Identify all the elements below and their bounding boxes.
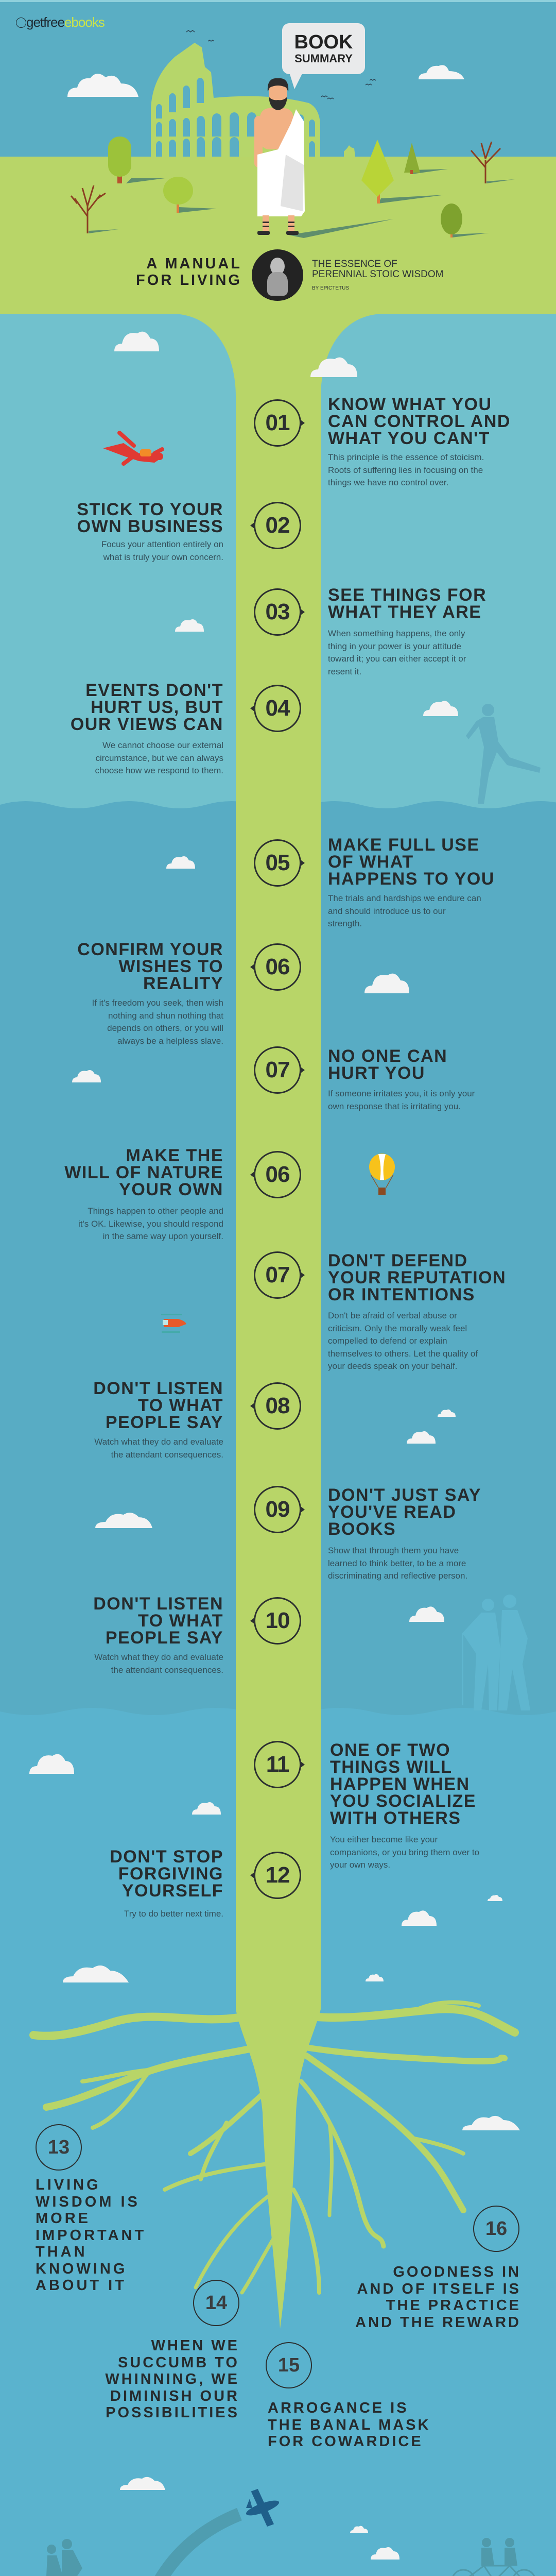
circle 06b — [254, 1151, 301, 1198]
text 16: GOODNESS IN — [393, 2264, 521, 2280]
text 10: the attendant consequences. — [111, 1665, 223, 1674]
title: A MANUAL — [146, 256, 242, 272]
text 06: If it's freedom you seek, then wish — [92, 998, 223, 1008]
text 16: AND OF ITSELF IS — [357, 2280, 521, 2297]
circle 02: 02 — [266, 513, 289, 538]
circle 13: 13 — [48, 2137, 70, 2158]
heading 06: REALITY — [143, 974, 223, 993]
heading 11: YOU SOCIALIZE — [330, 1791, 476, 1811]
text 04: circumstance, but we can always — [96, 753, 223, 762]
circle 07: 07 — [266, 1057, 289, 1082]
text 06 — [92, 998, 223, 1046]
circle 10 — [254, 1597, 301, 1645]
item 07b — [254, 1251, 506, 1371]
heading 08 — [93, 1379, 223, 1432]
heading 01: CAN CONTROL AND — [328, 412, 511, 431]
heading 11: THINGS WILL — [330, 1757, 452, 1777]
heading 06: CONFIRM YOUR — [77, 940, 223, 959]
circle 05 — [254, 839, 301, 887]
heading 01 — [328, 395, 511, 448]
circle 15 — [266, 2342, 312, 2388]
heading 08: PEOPLE SAY — [106, 1413, 223, 1432]
text 14: POSSIBILITIES — [106, 2404, 239, 2421]
subtitle: BY EPICTETUS — [312, 285, 349, 291]
text 04 — [95, 740, 223, 775]
text 04: We cannot choose our external — [102, 740, 223, 750]
trunk — [236, 361, 321, 1994]
text 13: IMPORTANT — [36, 2227, 146, 2243]
text 15: THE BANAL MASK — [268, 2416, 430, 2433]
heading 09 — [328, 1485, 481, 1539]
heading 03: SEE THINGS FOR — [328, 585, 486, 605]
text 09: Show that through them you have — [328, 1546, 459, 1555]
text 07b: your deeds speak on your behalf. — [328, 1361, 457, 1371]
heading 07b: OR INTENTIONS — [328, 1285, 475, 1304]
balloon — [369, 1154, 395, 1195]
text 01 — [328, 452, 484, 487]
circle 03: 03 — [266, 599, 289, 624]
circle 16: 16 — [485, 2218, 507, 2240]
circle 16 — [473, 2206, 519, 2252]
heading 11 — [330, 1742, 476, 1827]
text 13: ABOUT IT — [36, 2277, 127, 2294]
heading 05: OF WHAT — [328, 852, 414, 872]
text 02 — [101, 539, 223, 562]
circle 01 — [254, 399, 301, 447]
text 11: You either become like your — [330, 1835, 438, 1844]
heading 05: MAKE FULL USE — [328, 835, 480, 855]
heading 11: HAPPEN WHEN — [330, 1774, 470, 1794]
heading 07 — [328, 1046, 447, 1083]
heading 06b — [64, 1146, 223, 1199]
philosopher figure — [254, 78, 394, 238]
text 15: FOR COWARDICE — [268, 2433, 423, 2450]
subtitle: PERENNIAL STOIC WISDOM — [312, 269, 443, 280]
text 11 — [330, 1834, 479, 1871]
roots — [33, 1989, 515, 2329]
heading 08: TO WHAT — [138, 1396, 223, 1415]
heading 12: DON'T STOP — [110, 1847, 223, 1867]
text 07: own response that is irritating you. — [328, 1101, 461, 1111]
text 06b: Things happen to other people and — [88, 1206, 223, 1216]
text 06: always be a helpless slave. — [117, 1036, 223, 1046]
text 08: Watch what they do and evaluate — [94, 1437, 223, 1447]
text 14 — [105, 2337, 239, 2421]
heading 10: DON'T LISTEN — [93, 1594, 223, 1614]
circle 09 — [254, 1486, 301, 1533]
mid clouds — [29, 332, 520, 2576]
text 02: Focus your attention entirely on — [101, 539, 223, 549]
circle 11 — [254, 1741, 301, 1788]
icon: epictetus portrait — [252, 249, 303, 301]
speech bubble: book summary: SUMMARY — [294, 52, 353, 65]
circle 13 — [36, 2124, 82, 2171]
text 14: DIMINISH OUR — [110, 2387, 239, 2404]
text 07: If someone irritates you, it is only your — [328, 1089, 475, 1098]
sky panel 3 with wave — [0, 1708, 556, 2576]
text 11: companions, or you bring them over to — [330, 1848, 479, 1857]
text 01: Roots of suffering lies in focusing on the — [328, 465, 483, 475]
text 08 — [94, 1437, 223, 1459]
text 10: Watch what they do and evaluate — [94, 1652, 223, 1662]
text 09 — [328, 1546, 467, 1581]
heading 08: DON'T LISTEN — [93, 1379, 223, 1398]
text 07 — [328, 1089, 475, 1111]
circle 02 — [254, 502, 301, 549]
text 05: and should introduce us to our — [328, 906, 446, 916]
heading 04 — [71, 681, 223, 734]
hikers silhouette — [462, 1595, 530, 1710]
text 03: toward it; you can either accept it or — [328, 654, 466, 664]
text 08: the attendant consequences. — [111, 1450, 223, 1459]
text 13: KNOWING — [36, 2261, 127, 2277]
item 12 — [77, 1849, 301, 1923]
root item 13 — [36, 2124, 159, 2297]
heading 06: WISHES TO — [118, 957, 223, 976]
heading 12: FORGIVING — [118, 1864, 223, 1884]
title — [136, 256, 242, 289]
text 05: strength. — [328, 919, 362, 928]
item 01 — [254, 395, 511, 487]
item 07 — [254, 1046, 475, 1111]
couple silhouette — [41, 2539, 82, 2576]
root item 14 — [82, 2280, 239, 2425]
circle 04 — [254, 685, 301, 732]
circle 12: 12 — [266, 1862, 289, 1888]
circle 08 — [254, 1382, 301, 1430]
circle 11: 11 — [266, 1752, 289, 1777]
circle 06: 06 — [266, 954, 289, 979]
text 09: discriminating and reflective person. — [328, 1571, 467, 1581]
birds — [186, 30, 376, 99]
heading 07: HURT YOU — [328, 1063, 425, 1083]
heading 02 — [77, 500, 223, 536]
text 13: MORE — [36, 2210, 91, 2227]
circle 01: 01 — [266, 410, 289, 435]
heading 02: STICK TO YOUR — [77, 500, 223, 519]
heading 12 — [110, 1849, 223, 1900]
heading 07b: YOUR REPUTATION — [328, 1268, 506, 1287]
text 07b: Don't be afraid of verbal abuse or — [328, 1311, 457, 1320]
logo top: getfreeebooks — [26, 14, 105, 30]
text 13: THAN — [36, 2244, 88, 2260]
speech bubble: book summary — [282, 23, 365, 89]
circle 07 — [254, 1046, 301, 1094]
heading 07: NO ONE CAN — [328, 1046, 447, 1066]
text 07b: criticism. Only the morally weak feel — [328, 1323, 467, 1333]
heading 06b: WILL OF NATURE — [64, 1163, 223, 1182]
item 05 — [254, 835, 495, 928]
heading 04: OUR VIEWS CAN — [71, 715, 223, 734]
text 13: WISDOM IS — [36, 2194, 140, 2210]
root item 16 — [335, 2206, 523, 2334]
text 14: WHEN WE — [151, 2337, 239, 2354]
text 06b: in the same way upon yourself. — [103, 1231, 223, 1241]
text 14: WHINNING, WE — [105, 2371, 239, 2387]
circle 14: 14 — [205, 2292, 227, 2314]
heading 01: WHAT YOU CAN'T — [328, 429, 490, 448]
circle 14 — [193, 2280, 239, 2326]
heading 10: PEOPLE SAY — [106, 1628, 223, 1648]
heading 07b — [328, 1251, 506, 1304]
heading 07b: DON'T DEFEND — [328, 1251, 468, 1270]
text 03: thing in your power is your attitude — [328, 641, 461, 651]
text 05 — [328, 893, 481, 928]
text 05: The trials and hardships we endure can — [328, 893, 481, 903]
item 10 — [93, 1594, 301, 1674]
tandem bike silhouette — [452, 2538, 535, 2576]
item 04 — [71, 681, 301, 775]
text 03: resent it. — [328, 667, 361, 676]
text 02: what is truly your own concern. — [103, 552, 223, 562]
subtitle — [312, 259, 443, 291]
sky panel 2 with wave — [0, 801, 556, 1721]
heading 03: WHAT THEY ARE — [328, 602, 481, 622]
text 06: depends on others, or you will — [107, 1023, 223, 1033]
heading 02: OWN BUSINESS — [77, 517, 223, 536]
text 16: THE PRACTICE — [386, 2297, 521, 2314]
sky panel 1 — [0, 314, 556, 824]
circle 04: 04 — [266, 696, 289, 721]
text 15: ARROGANCE IS — [268, 2400, 409, 2416]
top clouds — [67, 65, 464, 97]
heading 09: BOOKS — [328, 1519, 396, 1539]
text 13 — [36, 2177, 146, 2294]
text 15 — [268, 2400, 430, 2450]
circle 08: 08 — [266, 1393, 289, 1418]
circle 03 — [254, 588, 301, 636]
circle 09: 09 — [266, 1497, 289, 1522]
sky top — [0, 0, 556, 165]
heading 05: HAPPENS TO YOU — [328, 869, 495, 889]
item 06 — [77, 940, 301, 1046]
heading 06b: MAKE THE — [126, 1146, 223, 1165]
circle 06 — [254, 943, 301, 991]
heading 09: DON'T JUST SAY — [328, 1485, 481, 1505]
item 03 — [254, 585, 486, 676]
item 06b — [64, 1146, 301, 1241]
text 16 — [355, 2264, 521, 2331]
speech bubble: book summary: BOOK — [294, 31, 353, 53]
heading 06b: YOUR OWN — [119, 1180, 223, 1199]
text 09: learned to think better, to be a more — [328, 1558, 466, 1568]
text 06b: it's OK. Likewise, you should respond — [78, 1219, 223, 1228]
text 06: nothing and shun nothing that — [108, 1011, 223, 1020]
heading 09: YOU'VE READ — [328, 1502, 456, 1522]
heading 11: ONE OF TWO — [330, 1740, 450, 1760]
skydiver — [103, 433, 163, 464]
text 14: SUCCUMB TO — [118, 2354, 239, 2371]
item 02 — [77, 500, 301, 562]
heading 05 — [328, 835, 495, 889]
item 11 — [254, 1741, 542, 1876]
item 08 — [93, 1379, 301, 1459]
heading 06 — [77, 940, 223, 993]
heading 01: KNOW WHAT YOU — [328, 395, 492, 414]
text 07b — [328, 1311, 478, 1371]
item 09 — [254, 1485, 481, 1581]
helicopter — [161, 1314, 186, 1333]
circle 07b: 07 — [266, 1262, 289, 1287]
circle 07b — [254, 1251, 301, 1299]
text 03: When something happens, the only — [328, 629, 465, 638]
heading 12: YOURSELF — [122, 1881, 223, 1901]
text 12: Try to do better next time. — [124, 1909, 223, 1919]
root item 15 — [266, 2342, 461, 2458]
text 13: LIVING — [36, 2177, 101, 2193]
heading 03 — [328, 585, 486, 622]
heading 04: HURT US, BUT — [91, 698, 223, 717]
heading 04: EVENTS DON'T — [85, 681, 223, 700]
text 16: AND THE REWARD — [355, 2314, 521, 2331]
circle 12 — [254, 1852, 301, 1899]
subtitle: THE ESSENCE OF — [312, 259, 397, 269]
plane with trail — [149, 2488, 281, 2576]
circle 06b: 06 — [266, 1162, 289, 1187]
text 07b: compelled to defend or explain — [328, 1336, 447, 1346]
heading 11: WITH OTHERS — [330, 1808, 461, 1828]
text 07b: themselves to others. Let the quality of — [328, 1349, 478, 1358]
top trees — [71, 137, 515, 238]
text 04: choose how we respond to them. — [95, 766, 223, 775]
text 06b — [78, 1206, 223, 1241]
title: FOR LIVING — [136, 272, 242, 289]
circle 05: 05 — [266, 850, 289, 875]
heading 10 — [93, 1594, 223, 1648]
text 03 — [328, 629, 466, 676]
text 01: This principle is the essence of stoicism. — [328, 452, 484, 462]
colosseum — [151, 43, 355, 157]
text 10 — [94, 1652, 223, 1674]
circle 15: 15 — [278, 2354, 300, 2376]
text 11: your own ways. — [330, 1860, 390, 1870]
heading 10: TO WHAT — [138, 1611, 223, 1631]
circle 10: 10 — [266, 1608, 289, 1633]
runner silhouette — [466, 704, 541, 804]
text 01: things we have no control over. — [328, 478, 448, 487]
